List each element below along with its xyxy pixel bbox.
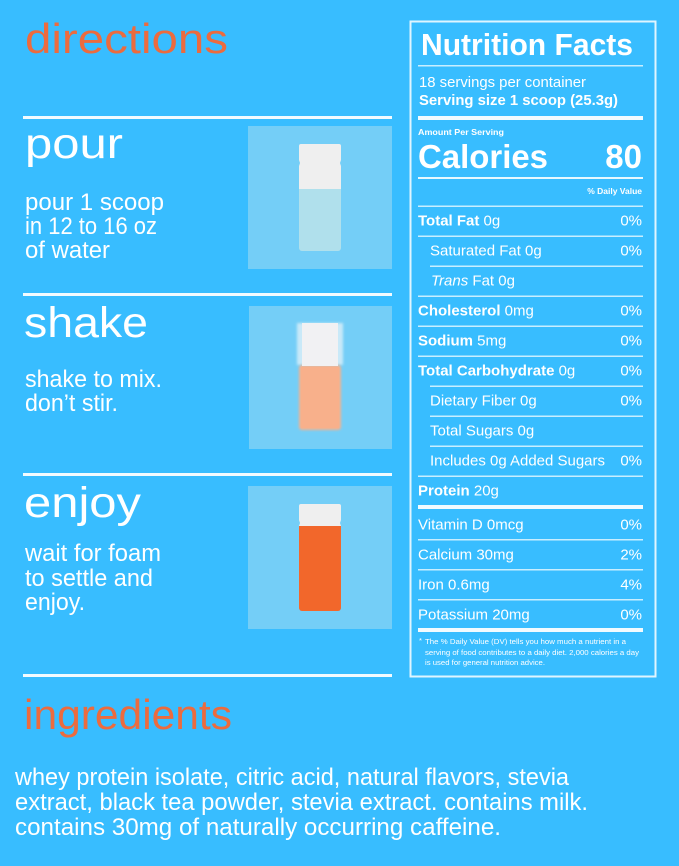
- nutrient rows: 0%: [620, 452, 642, 470]
- nutrient rows: Total Sugars 0g: [430, 422, 534, 440]
- text: servings: [419, 74, 618, 109]
- nutrient rows: 2%: [620, 546, 642, 564]
- text: pour instructions: [25, 189, 164, 264]
- heading: directions: directions: [25, 15, 228, 62]
- text: pour instructions: pour 1 scoop: [25, 189, 164, 216]
- text: ingredients list: whey protein isolate, citric acid, natural flavors, stevia: [14, 764, 569, 791]
- text: pour instructions: of water: [25, 237, 110, 264]
- nutrient rows: Saturated Fat 0g: [430, 242, 542, 260]
- text: shake instructions: don’t stir.: [25, 390, 118, 417]
- text: calories: 80: [605, 138, 642, 175]
- text: pour instructions: in 12 to 16 oz: [25, 213, 157, 240]
- icon: shaking bottle: [249, 306, 392, 449]
- nutrient rows: 0%: [620, 332, 642, 350]
- icon: bottle with orange drink: [248, 486, 392, 629]
- text: shake instructions: [25, 366, 162, 417]
- nutrient rows: Sodium 5mg: [418, 332, 506, 350]
- nutrient rows: Protein 20g: [418, 482, 499, 500]
- nutrient rows: Iron 0.6mg: [418, 576, 490, 594]
- nutrient rows: 0%: [620, 606, 642, 624]
- nutrient rows: Trans Fat 0g: [431, 272, 515, 290]
- nutrient rows: Potassium 20mg: [418, 606, 530, 624]
- text: ingredients list: [14, 764, 588, 841]
- text: amount per serving: Amount Per Serving: [418, 127, 504, 137]
- text: enjoy instructions: to settle and: [25, 565, 153, 592]
- nutrient rows: Calcium 30mg: [418, 546, 514, 564]
- panel: enjoy: [23, 473, 392, 629]
- nutrient rows: 0%: [620, 212, 642, 230]
- panel: shake: [23, 293, 392, 449]
- nutrient rows: 0%: [620, 362, 642, 380]
- nutrient rows: 0%: [620, 516, 642, 534]
- text: servings: Serving size 1 scoop (25.3g): [419, 92, 618, 109]
- text: ingredients list: contains 30mg of naturally occurring caffeine.: [15, 814, 501, 841]
- text: calories: Calories: [418, 138, 548, 175]
- text: enjoy instructions: wait for foam: [24, 540, 161, 567]
- text: servings: 18 servings per container: [419, 74, 586, 91]
- nutrient rows: 0%: [620, 392, 642, 410]
- nutrient rows: Total Fat 0g: [418, 212, 500, 230]
- nutrient rows: [418, 212, 643, 632]
- text: footnote: is used for general nutrition advice.: [425, 658, 545, 667]
- panel: nutrition facts: [410, 22, 656, 676]
- text: footnote: serving of food contributes to a daily diet. 2,000 calories a day: [425, 648, 639, 657]
- text: ingredients list: extract, black tea powder, stevia extract. contains milk.: [15, 789, 588, 816]
- text: enjoy instructions: [24, 540, 161, 616]
- text: footnote: *: [419, 636, 422, 645]
- nutrient rows: Cholesterol 0mg: [418, 302, 534, 320]
- nutrient rows: Includes 0g Added Sugars: [430, 452, 605, 470]
- icon: bottle with water: [248, 126, 392, 269]
- nutrient rows: Vitamin D 0mcg: [418, 516, 524, 534]
- text: footnote: The % Daily Value (DV) tells you how much a nutrient in a: [425, 637, 627, 646]
- nutrient rows: 0%: [620, 302, 642, 320]
- nutrient rows: Dietary Fiber 0g: [430, 392, 537, 410]
- nutrient rows: Total Carbohydrate 0g: [418, 362, 575, 380]
- nutrient rows: 0%: [620, 242, 642, 260]
- heading: ingredients: ingredients: [24, 691, 232, 738]
- heading: shake: shake: [24, 299, 148, 347]
- title: nutrition facts: Nutrition Facts: [421, 27, 633, 62]
- text: calories: [418, 138, 642, 175]
- text: footnote: [419, 636, 639, 667]
- nutrient rows: 4%: [620, 576, 642, 594]
- heading: pour: pour: [25, 120, 123, 168]
- text: shake instructions: shake to mix.: [25, 366, 162, 393]
- panel: pour: [23, 116, 392, 269]
- text: enjoy instructions: enjoy.: [25, 589, 85, 616]
- text: percent daily value: % Daily Value: [587, 186, 642, 196]
- heading: enjoy: enjoy: [24, 479, 142, 527]
